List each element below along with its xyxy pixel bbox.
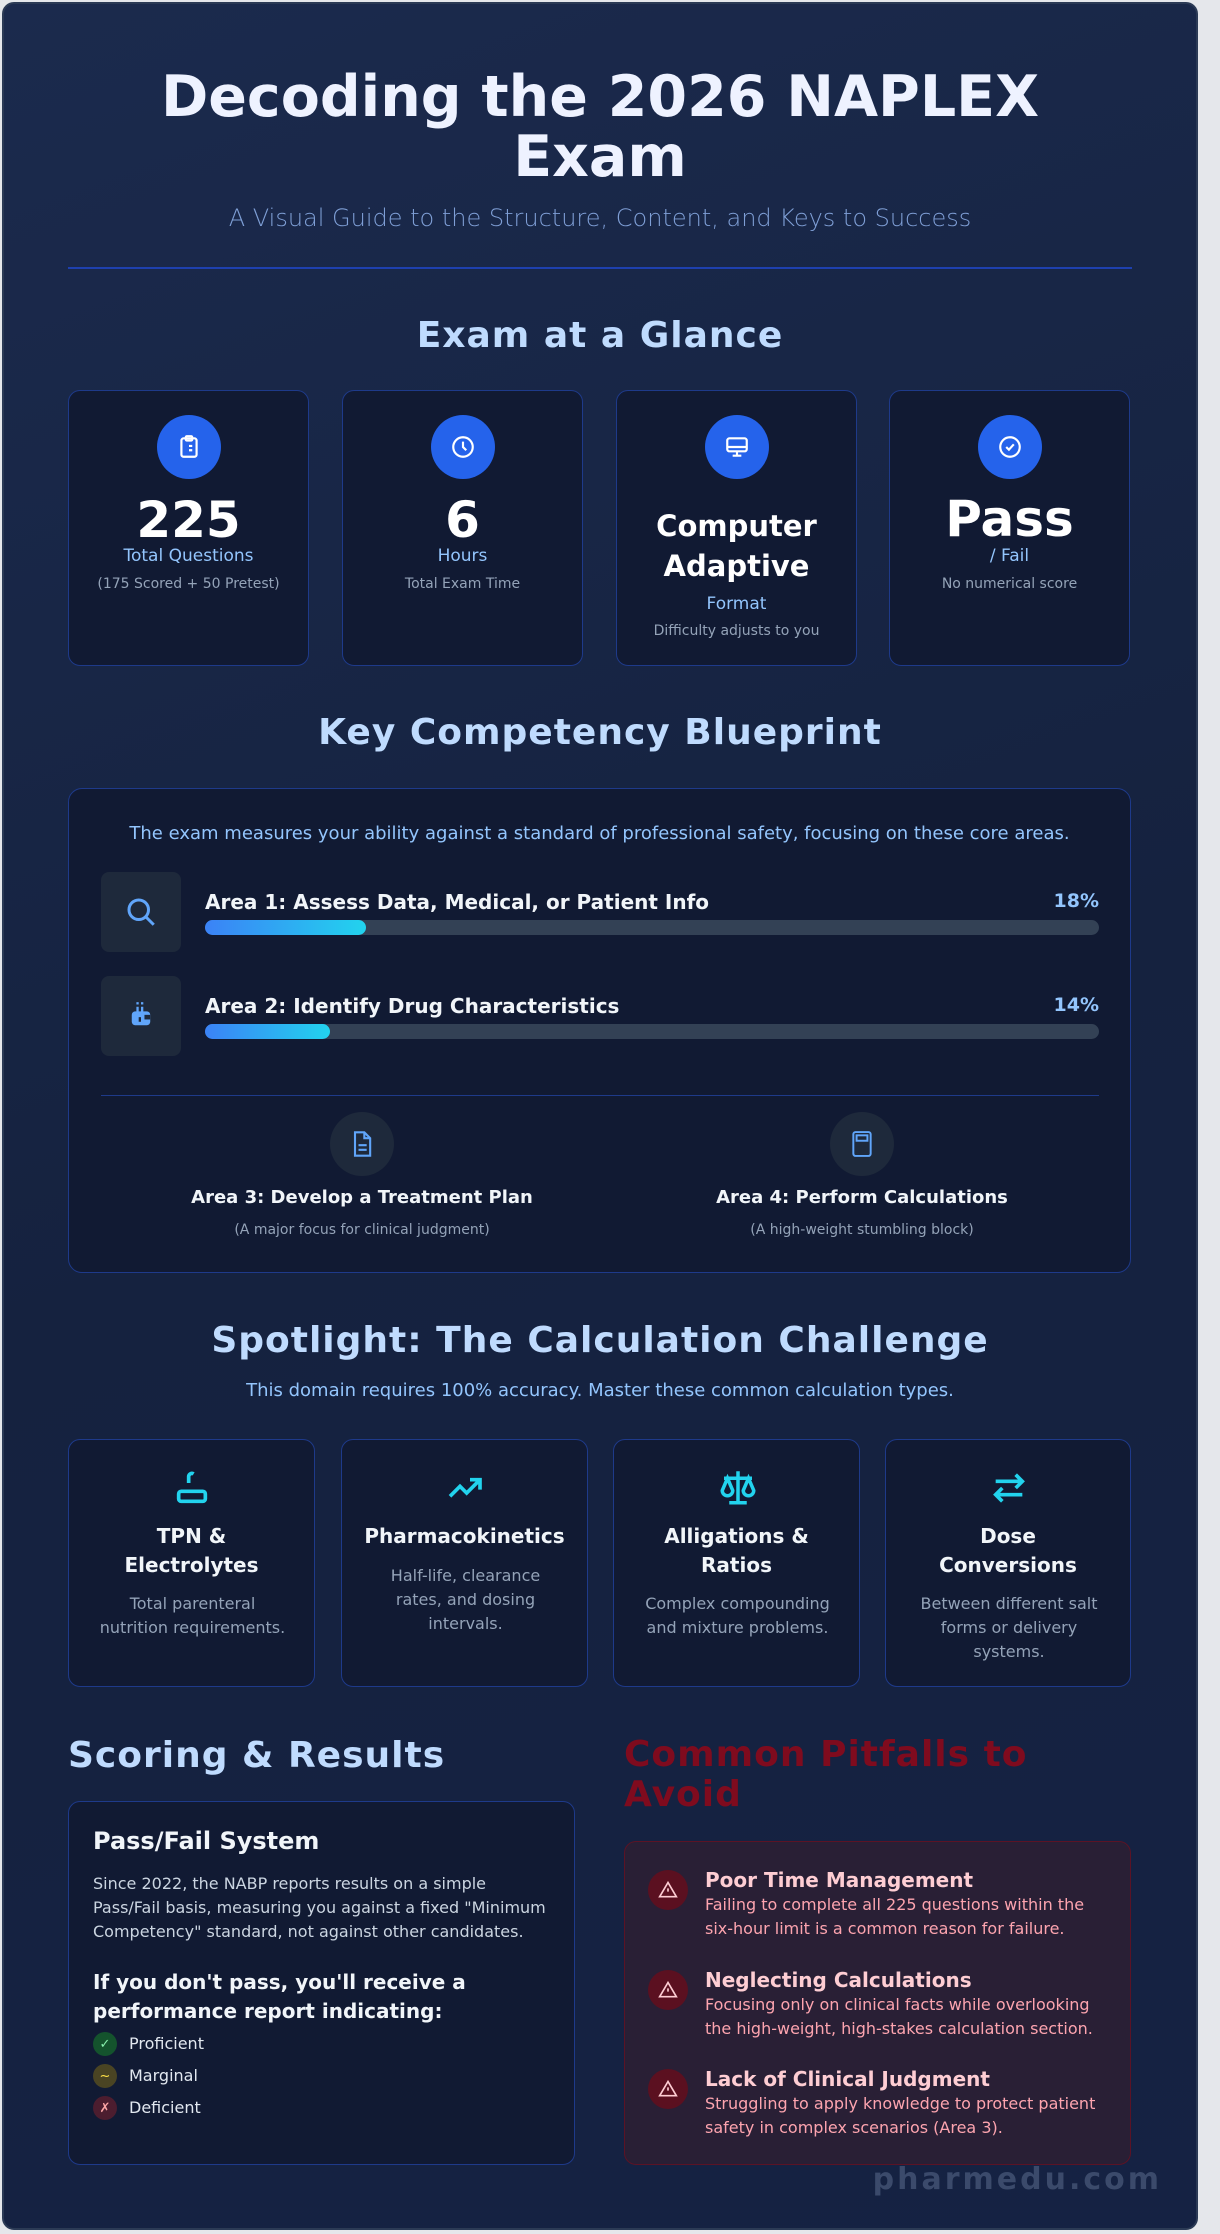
stat card: computer adaptive: Computer	[656, 509, 817, 543]
icon: iv bag	[176, 1472, 208, 1504]
panel: pass/fail system: Pass/Fail basis, measuring you against a fixed "Minimum	[93, 1898, 546, 1917]
list: deficient: ✗	[100, 2100, 110, 2116]
area 1: 18%	[1054, 890, 1099, 912]
pitfall 3	[648, 2067, 1095, 2137]
stat card: computer adaptive: Adaptive	[664, 549, 809, 583]
icon: calculator	[830, 1112, 894, 1176]
heading: Scoring & Results: Scoring & Results	[68, 1735, 445, 1776]
stat card: 225 questions: 225	[136, 491, 241, 549]
pitfall 2: Focusing only on clinical facts while overlooking the high-weight, high-stakes calculation section.	[705, 1995, 1093, 2038]
calc card: TPN: nutrition requirements.	[100, 1618, 285, 1637]
calc card: TPN: Electrolytes	[124, 1553, 259, 1577]
title: Decoding the 2026 NAPLEX	[161, 64, 1039, 130]
icon: check circle	[978, 415, 1042, 479]
area 4: Area 4: Perform Calculations	[716, 1187, 1008, 1208]
icon: document	[330, 1112, 394, 1176]
panel: pass/fail system: Competency" standard, not against other candidates.	[93, 1922, 524, 1941]
calc card: alligations	[613, 1439, 860, 1687]
list: marginal: Marginal	[129, 2066, 198, 2085]
list: proficient	[93, 2032, 204, 2056]
panel: pass/fail system: Since 2022, the NABP reports results on a simple	[93, 1874, 486, 1893]
icon: monitor	[705, 415, 769, 479]
calc card: alligations: Alligations &	[664, 1524, 809, 1548]
stat card: 6 hours	[342, 390, 583, 666]
icon: trend up	[448, 1478, 482, 1498]
heading: Exam at a Glance: Exam at a Glance	[417, 315, 783, 356]
area 1	[101, 872, 1099, 952]
panel: pass/fail system: Pass/Fail System	[93, 1827, 319, 1855]
icon: capsule hand	[101, 976, 181, 1056]
stat card: 225 questions	[68, 390, 309, 666]
stat card: 6 hours: Total Exam Time	[405, 576, 520, 592]
stat card: pass/fail: No numerical score	[942, 576, 1077, 592]
icon: swap arrows	[993, 1473, 1025, 1503]
calc card: TPN: Total parenteral	[130, 1594, 255, 1613]
list: deficient: Deficient	[129, 2098, 201, 2117]
stat card: pass/fail	[889, 390, 1130, 666]
title: Exam	[513, 124, 687, 190]
stat card: pass/fail: Pass	[945, 490, 1074, 548]
area 2	[101, 976, 1099, 1056]
pitfall 1	[648, 1868, 1084, 1938]
pitfall 2: Neglecting Calculations	[705, 1968, 972, 1992]
calc card: dose conversions: Conversions	[939, 1553, 1077, 1577]
icon: warning	[648, 1970, 688, 2010]
heading: Spotlight: Spotlight: The Calculation Challenge	[211, 1320, 989, 1361]
list: proficient: ✓	[100, 2036, 110, 2052]
stat card: 225 questions: Total Questions	[124, 546, 254, 566]
area 2: Area 2: Identify Drug Characteristics	[205, 994, 619, 1018]
calc card: PK: Pharmacokinetics	[364, 1524, 565, 1548]
area 4: (A high-weight stumbling block)	[750, 1222, 974, 1238]
area 1: Area 1: Assess Data, Medical, or Patient Info	[205, 890, 709, 914]
calc card: dose conversions: Dose	[980, 1524, 1036, 1548]
stat card: computer adaptive: Format	[707, 594, 766, 614]
area 4	[716, 1112, 1008, 1238]
area 2: 14%	[1054, 994, 1099, 1016]
stat card: computer adaptive: Difficulty adjusts to you	[654, 623, 819, 639]
calc card: PK	[341, 1439, 588, 1687]
pitfall 1: Failing to complete all 225 questions within the six-hour limit is a common reason for failure.	[705, 1895, 1084, 1938]
stat card: 225 questions: (175 Scored + 50 Pretest)	[97, 576, 280, 592]
calc card: dose conversions	[885, 1439, 1131, 1687]
panel: pitfalls	[624, 1841, 1131, 2165]
heading: Key Competency Blueprint: Key Competency Blueprint	[318, 712, 882, 753]
pitfall 3: Struggling to apply knowledge to protect patient safety in complex scenarios (Area 3).	[705, 2094, 1095, 2137]
subtitle: A Visual Guide to the Structure, Content, and Keys to Success	[229, 204, 971, 232]
panel: pass/fail system: If you don't pass, you'll receive a performance report indicating:	[93, 1970, 466, 2023]
icon: scales	[720, 1471, 756, 1504]
calc card: dose conversions: Between different salt forms or delivery systems.	[920, 1594, 1098, 1661]
stat card: pass/fail: / Fail	[990, 546, 1029, 566]
icon: warning	[648, 2069, 688, 2109]
heading: Common Pitfalls: Common Pitfalls to Avoid	[624, 1734, 1028, 1815]
intro text: The exam measures your ability against a standard of professional safety, focusing on these core areas.	[129, 823, 1070, 844]
icon: search	[101, 872, 181, 952]
icon: clipboard	[157, 415, 221, 479]
panel: pass/fail system	[68, 1801, 575, 2165]
stat card: computer adaptive	[616, 390, 857, 666]
area 3	[191, 1112, 533, 1238]
icon: clock	[431, 415, 495, 479]
stat card: 6 hours: Hours	[438, 546, 487, 566]
pitfall 2	[648, 1968, 1093, 2038]
list: proficient: Proficient	[129, 2034, 204, 2053]
calc card: PK: Half-life, clearance rates, and dosing intervals.	[391, 1566, 540, 1633]
stat card: 6 hours: 6	[445, 491, 480, 549]
calc card: alligations: Complex compounding and mixture problems.	[645, 1594, 830, 1637]
title	[161, 64, 1039, 190]
list: deficient	[93, 2096, 201, 2120]
list: marginal	[93, 2064, 198, 2088]
spotlight subtitle: This domain requires 100% accuracy. Master these common calculation types.	[246, 1380, 954, 1401]
calc card: alligations: Ratios	[701, 1553, 772, 1577]
watermark: pharmedu.com	[873, 2162, 1162, 2197]
area 3: Area 3: Develop a Treatment Plan	[191, 1187, 533, 1208]
list: marginal: ~	[100, 2068, 110, 2084]
calc card: TPN: TPN &	[157, 1524, 226, 1548]
icon: warning	[648, 1870, 688, 1910]
calc card: TPN	[68, 1439, 315, 1687]
area 3: (A major focus for clinical judgment)	[234, 1222, 490, 1238]
pitfall 3: Lack of Clinical Judgment	[705, 2067, 990, 2091]
panel: blueprint	[68, 788, 1131, 1273]
pitfall 1: Poor Time Management	[705, 1868, 973, 1892]
